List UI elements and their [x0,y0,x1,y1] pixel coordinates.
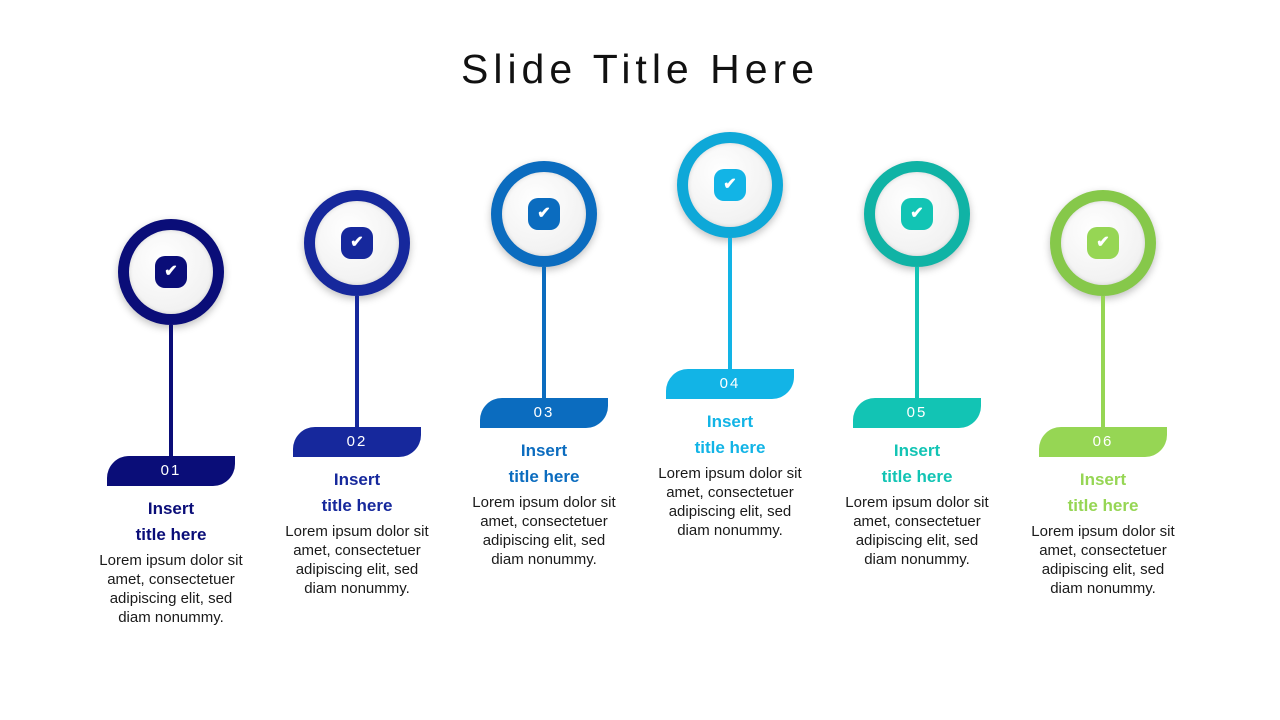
text 02 [285,523,429,597]
heading 01: title here [136,525,206,544]
text 04: diam nonummy. [677,522,783,539]
text 03: amet, consectetuer [480,513,608,530]
text 03: Lorem ipsum dolor sit [472,494,616,511]
circle 02: ✔ [350,234,364,251]
heading 04: Insert [707,412,753,431]
heading 01 [136,499,206,544]
circle 03 [491,161,597,267]
title: Slide Title Here [461,46,819,92]
heading 06 [1068,470,1138,515]
text 01: amet, consectetuer [107,571,235,588]
text 03: diam nonummy. [491,551,597,568]
step 06 [1031,189,1175,597]
circle 05 [864,161,970,267]
tab 04: 04 [720,375,740,392]
text 02: Lorem ipsum dolor sit [285,523,429,540]
tab 05: 05 [907,404,927,421]
tab 04 [666,369,794,399]
circle 04: ✔ [723,176,737,193]
text 01: diam nonummy. [118,609,224,626]
text 04: amet, consectetuer [666,484,794,501]
step 03 [472,160,616,568]
circle 06: ✔ [1096,234,1110,251]
heading 06: title here [1068,496,1138,515]
heading 01: Insert [148,499,194,518]
tab 01: 01 [161,462,181,479]
text 06: Lorem ipsum dolor sit [1031,523,1175,540]
text 06: diam nonummy. [1050,580,1156,597]
text 06 [1031,523,1175,597]
step 05 [845,160,989,568]
heading 02 [322,470,392,515]
connector line 04 [728,238,732,369]
text 05: diam nonummy. [864,551,970,568]
text 06: amet, consectetuer [1039,542,1167,559]
heading 02: title here [322,496,392,515]
tab 02 [293,427,421,457]
text 04: Lorem ipsum dolor sit [658,465,802,482]
connector line 02 [355,296,359,427]
circle 04 [677,132,783,238]
heading 03: title here [509,467,579,486]
text 06: adipiscing elit, sed [1042,561,1164,578]
heading 03: Insert [521,441,567,460]
circle 03: ✔ [537,205,551,222]
heading 02: Insert [334,470,380,489]
connector line 05 [915,267,919,398]
circle 06 [1050,190,1156,296]
circle 05: ✔ [910,205,924,222]
tab 03: 03 [534,404,554,421]
heading 05: Insert [894,441,940,460]
text 03 [472,494,616,568]
text 01 [99,552,243,626]
step 01 [99,218,243,626]
tab 03 [480,398,608,428]
circle 01: ✔ [164,263,178,280]
heading 05 [882,441,952,486]
tab 06 [1039,427,1167,457]
circle 02 [304,190,410,296]
text 04 [658,465,802,539]
heading 06: Insert [1080,470,1126,489]
text 02: amet, consectetuer [293,542,421,559]
step 02 [285,189,429,597]
text 01: Lorem ipsum dolor sit [99,552,243,569]
connector line 03 [542,267,546,398]
text 02: adipiscing elit, sed [296,561,418,578]
text 05 [845,494,989,568]
text 03: adipiscing elit, sed [483,532,605,549]
heading 03 [508,441,579,486]
connector line 06 [1101,296,1105,427]
circle 01 [118,219,224,325]
text 04: adipiscing elit, sed [669,503,791,520]
heading 05: title here [882,467,952,486]
step 04 [658,131,802,539]
text 05: Lorem ipsum dolor sit [845,494,989,511]
tab 01 [107,456,235,486]
heading 04 [694,412,765,457]
connector line 01 [169,325,173,456]
text 05: amet, consectetuer [853,513,981,530]
text 01: adipiscing elit, sed [110,590,232,607]
text 02: diam nonummy. [304,580,410,597]
tab 06: 06 [1093,433,1113,450]
text 05: adipiscing elit, sed [856,532,978,549]
heading 04: title here [695,438,765,457]
tab 05 [853,398,981,428]
tab 02: 02 [347,433,367,450]
